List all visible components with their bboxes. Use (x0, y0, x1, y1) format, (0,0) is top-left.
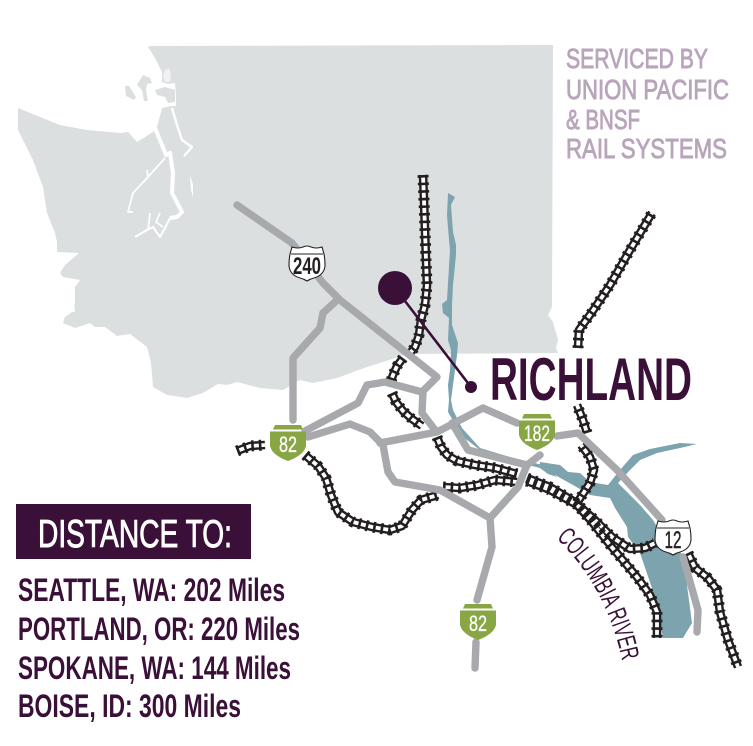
icon: Interstate 82 shield, west: 82 (279, 432, 297, 457)
text block: city distances: SPOKANE, WA: 144 Miles (18, 650, 291, 686)
Columbia River, narrow upper reach (442, 193, 557, 477)
icon: Interstate 182 shield (519, 414, 555, 450)
Washington state landmass (18, 45, 558, 398)
icon: Interstate 82 shield, south: 82 (469, 611, 487, 636)
icon: US 12 shield: 12 (664, 527, 682, 554)
location pin: Richland (378, 271, 477, 393)
Columbia River, wide lower reach (540, 443, 697, 638)
text block: city distances: BOISE, ID: 300 Miles (18, 688, 241, 724)
text block: rail systems note: & BNSF (566, 104, 640, 135)
icon: US 240 shield: 240 (293, 253, 321, 280)
label: Columbia River: COLUMBIA RIVER (559, 528, 638, 660)
text block: city distances: PORTLAND, OR: 220 Miles (18, 611, 300, 647)
icon: US 12 shield (655, 520, 691, 555)
text block: city distances (18, 572, 300, 724)
icon: US 240 shield (289, 246, 325, 281)
icon: Interstate 182 shield: 182 (524, 421, 550, 446)
heading: distance to: DISTANCE TO: (38, 513, 232, 556)
icon: Interstate 82 shield, south (460, 604, 496, 640)
text block: rail systems note: SERVICED BY (566, 43, 708, 74)
rail lines (237, 175, 738, 667)
text block: rail systems note (566, 43, 729, 164)
text block: city distances: SEATTLE, WA: 202 Miles (18, 572, 285, 608)
highway network (237, 205, 698, 668)
icon: Interstate 82 shield, west (270, 425, 306, 461)
heading: distance to (16, 504, 251, 559)
